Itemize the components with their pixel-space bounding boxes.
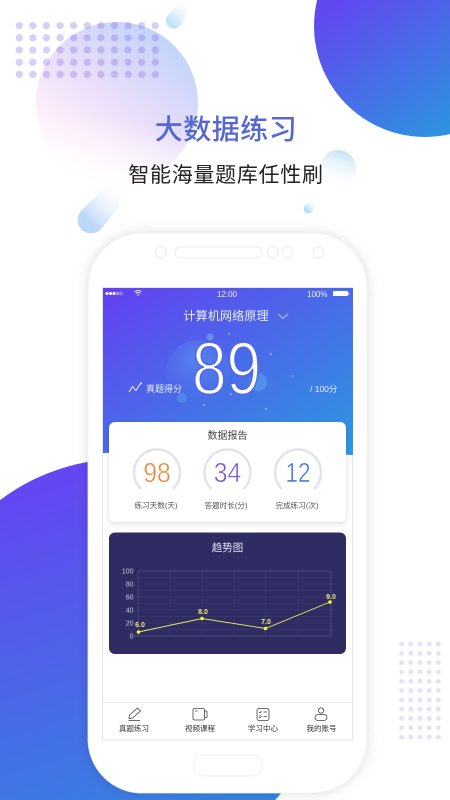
capsule: top [166,0,197,29]
header panel [103,288,353,455]
course name: 计算机网络原理 [183,308,269,323]
status bar battery: 100% [307,290,327,299]
status bar battery [307,290,349,299]
tab: account: 我的账号 [306,723,336,733]
status bar time: 12:00 [217,290,238,299]
gauge: practice days: 练习天数(天) [134,500,178,510]
gauge: answer time: 答题时长(分) [204,500,248,510]
gauge: completed: 12 [286,457,310,488]
header background [103,288,353,455]
dot grid: top left [12,20,162,80]
score total: / 100分 [310,384,338,394]
data labels: 7.0 [261,619,271,626]
earpiece and sensors [156,247,324,258]
tab bar [103,702,353,733]
chart title: 趋势图 [212,541,243,554]
tab: practice: 真题练习 [119,723,149,733]
gauge: practice days [134,449,180,510]
data labels: 6.0 [135,622,145,629]
card: data report [109,422,346,522]
y axis labels: 80 [126,582,134,588]
y axis labels: 0 [130,634,134,640]
data labels: 8.0 [198,609,208,616]
data labels: 9.0 [326,594,336,601]
phone body [88,233,367,793]
card background [109,422,346,522]
capsule: small [304,201,316,213]
chart background [109,532,346,654]
score: 89 [192,327,261,410]
y axis labels: 20 [126,620,134,628]
gauge: completed [275,449,321,510]
gauge: completed: 完成练习(次) [275,500,319,510]
capsule: left [78,180,130,233]
tab: account [306,708,336,733]
subtitle: 智能海量题库任性刷 [128,164,324,187]
status bar signal [106,291,142,296]
data labels [135,594,336,629]
phone [88,233,367,793]
chevron [278,314,288,318]
y axis labels: 40 [126,608,134,614]
gauge: practice days: 98 [143,457,171,488]
gradient circle: bottom left [0,459,328,800]
y axis labels: 60 [126,594,134,602]
bubbles [166,333,294,410]
pale gradient circle [36,22,198,184]
card title: 数据报告 [208,429,248,442]
screen [102,288,352,740]
data points [137,600,332,634]
score label [129,382,182,394]
home button [194,755,262,776]
tab: study center: 学习中心 [248,723,278,733]
gauge: answer time [204,449,250,510]
tab: practice [119,708,149,733]
dot grid: bottom right [397,639,443,742]
tab: study center [248,708,278,733]
card: trend chart [109,532,346,654]
score label: 真题得分 [146,383,182,394]
y axis labels: 100 [122,568,134,576]
trend line [138,602,330,632]
title: 大数据练习 [155,114,297,145]
tab: video: 视频课程 [185,723,215,733]
gradient circle: top right [314,0,450,137]
y axis labels [122,568,134,640]
tab: video [185,708,215,733]
ball: right [320,150,356,186]
gauge: answer time: 34 [214,457,241,488]
